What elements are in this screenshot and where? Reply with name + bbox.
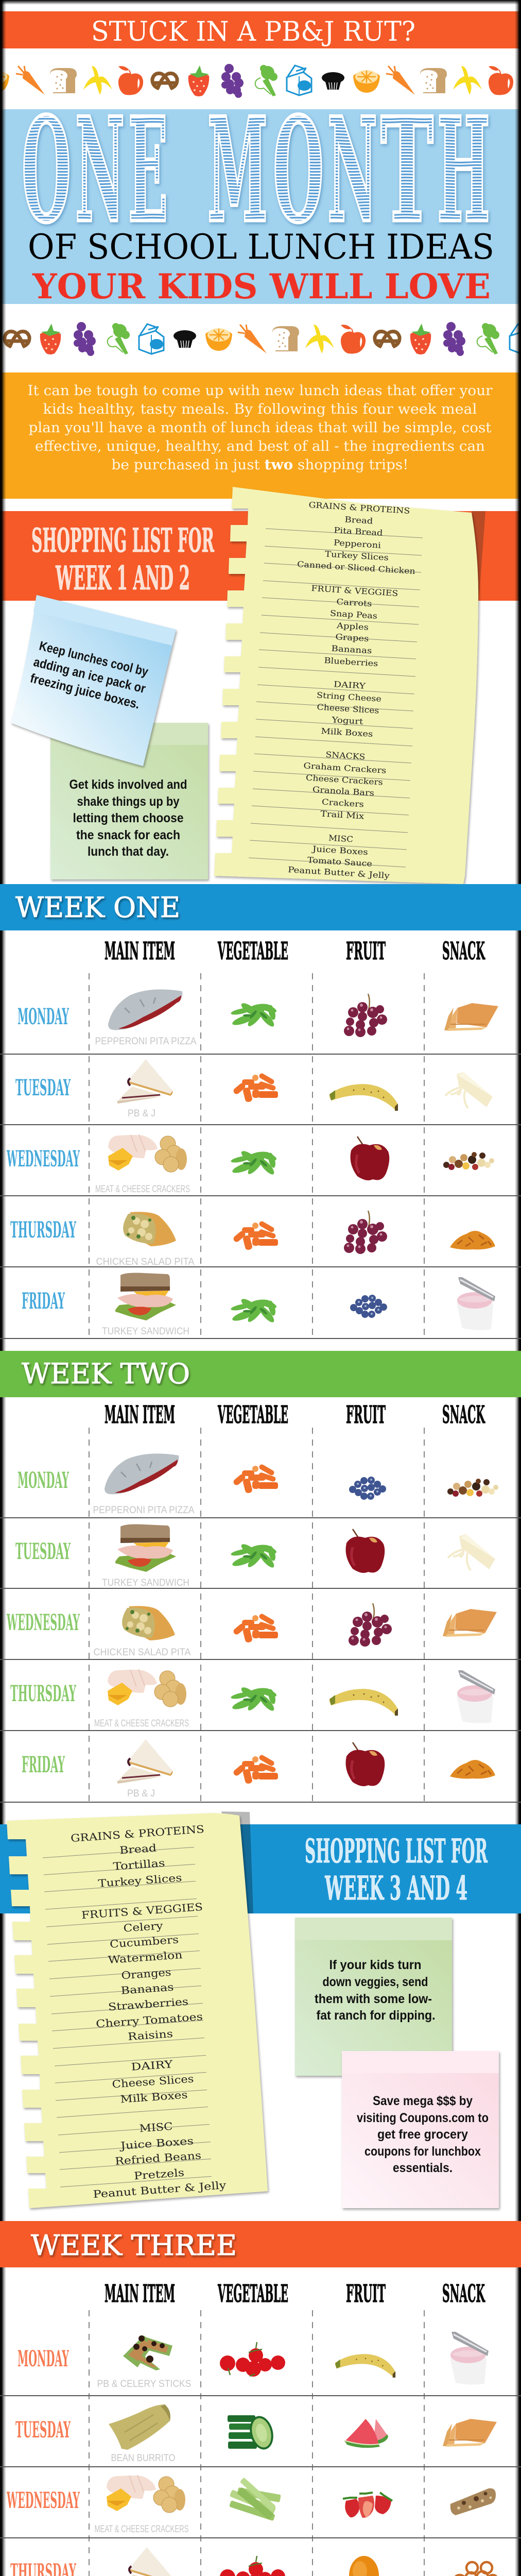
row: week one friday: TURKEY SANDWICH: [102, 1326, 189, 1337]
note: pink coupons tip: [342, 2051, 499, 2208]
row: week one wednesday: [7, 1134, 494, 1195]
column headers week two: [105, 1401, 485, 1429]
row: week two tuesday: [15, 1524, 495, 1588]
title: one month: M: [207, 86, 268, 255]
note: blue ice pack tip: adding an ice pack or: [32, 655, 147, 696]
column headers week two: FRUIT: [346, 1401, 386, 1429]
banner: week one: WEEK ONE: [15, 891, 180, 924]
note: pink coupons tip: coupons for lunchbox: [364, 2144, 481, 2159]
title: one month: N: [75, 86, 125, 255]
intro panel: plan you'll have a month of lunch ideas that will be simple, cost: [29, 420, 492, 436]
list text: fruit and veggies: Apples: [336, 621, 369, 632]
list text: fruits and veggies: Cucumbers: [109, 1933, 179, 1951]
note: shopping list paper week 3 and 4: [7, 1813, 268, 2208]
intro panel: kids healthy, tasty meals. By following this four week meal: [43, 401, 477, 417]
intro panel: be purchased in just two shopping trips!: [111, 457, 409, 473]
list text: grains and proteins: Bread: [119, 1842, 157, 1856]
list text: misc: Juice Boxes: [119, 2134, 194, 2152]
row: week one monday: MONDAY: [18, 1004, 70, 1030]
list text: dairy: DAIRY: [131, 2058, 173, 2073]
note: green snack tip: letting them choose: [73, 811, 184, 825]
column headers week three: VEGETABLE: [218, 2280, 288, 2308]
row: week two thursday: MEAT & CHEESE CRACKERS: [94, 1718, 189, 1729]
row: week three wednesday: MEAT & CHEESE CRACKERS: [95, 2524, 188, 2535]
list text: dairy: [317, 680, 381, 739]
note: green snack tip: Get kids involved and: [69, 777, 187, 792]
list text: snacks: Crackers: [321, 798, 364, 809]
row: week one friday: FRIDAY: [22, 1289, 65, 1314]
title: one month: N: [327, 86, 377, 255]
note: pink coupons tip: visiting Coupons.com to: [357, 2111, 489, 2125]
list text: dairy: [112, 2058, 194, 2106]
banner: week one: [0, 884, 521, 930]
note: pink coupons tip: essentials.: [393, 2161, 453, 2175]
list text: grains and proteins: Bread: [344, 515, 373, 526]
row: week three tuesday: BEAN BURRITO: [111, 2453, 175, 2464]
list text: snacks: Cheese Crackers: [306, 773, 383, 787]
row: week two monday: PEPPERONI PITA PIZZA: [93, 1505, 195, 1516]
row: week three monday: PB & CELERY STICKS: [97, 2379, 192, 2389]
column headers week three: [105, 2280, 485, 2308]
row: week one tuesday: [15, 1059, 493, 1119]
list text: fruit and veggies: FRUIT & VEGGIES: [311, 584, 398, 598]
heading: shopping list: [305, 1832, 488, 1908]
row: week three monday: [18, 2332, 489, 2389]
hero panel: title: [0, 86, 521, 307]
list text: misc: Juice Boxes: [311, 844, 368, 857]
row: week one friday: [22, 1273, 495, 1337]
column headers week one: MAIN ITEM: [105, 937, 175, 965]
list text: snacks: [303, 750, 387, 821]
row: week two monday: MONDAY: [18, 1468, 70, 1494]
title: one month: [22, 86, 490, 255]
row: week three monday: MONDAY: [18, 2346, 70, 2372]
list text: fruits and veggies: Oranges: [121, 1966, 171, 1981]
row: week one thursday: THURSDAY: [10, 1217, 77, 1243]
subtitle: of school lunch ideas: OF SCHOOL LUNCH IDEAS: [28, 227, 494, 267]
list text: fruits and veggies: Watermelon: [108, 1948, 183, 1966]
row: week one tuesday: PB & J: [128, 1108, 155, 1119]
list text: fruits and veggies: Celery: [123, 1919, 164, 1935]
list text: fruit and veggies: Bananas: [331, 644, 372, 655]
banner: week two: WEEK TWO: [22, 1358, 190, 1390]
intro panel: [0, 372, 521, 499]
column headers week one: [105, 937, 485, 965]
column headers week one: VEGETABLE: [218, 937, 288, 965]
list text: fruits and veggies: FRUITS & VEGGIES: [81, 1901, 203, 1921]
row: week two thursday: THURSDAY: [10, 1681, 77, 1707]
list text: grains and proteins: GRAINS & PROTEINS: [70, 1823, 205, 1844]
note: pink coupons tip: Save mega $$$ by: [373, 2094, 473, 2108]
banner: shopping list week 3 and 4: [0, 1811, 521, 1913]
column headers week two: VEGETABLE: [218, 1401, 288, 1429]
note: blue ice pack tip: Keep lunches cool by: [38, 639, 150, 679]
list text: dairy: Milk Boxes: [321, 726, 373, 739]
row: week one thursday: [10, 1211, 495, 1267]
list text: misc: Tomato Sauce: [307, 855, 372, 869]
row: week two monday: [18, 1453, 498, 1516]
list text: grains and proteins: Turkey Slices: [325, 549, 389, 563]
note: green snack tip: [50, 723, 208, 879]
intro panel: It can be tough to come up with new lunch ideas that offer your: [28, 383, 493, 399]
banner: shopping list week 1 and 2: [0, 511, 521, 601]
list text: fruits and veggies: Cherry Tomatoes: [95, 2010, 203, 2030]
subtitle: your kids will love: YOUR KIDS WILL LOVE: [32, 266, 491, 307]
row: week two tuesday: TUESDAY: [15, 1539, 71, 1565]
row: week one thursday: CHICKEN SALAD PITA: [96, 1257, 195, 1267]
column headers week one: FRUIT: [346, 937, 386, 965]
note: blue ice pack tip: [11, 595, 176, 766]
list text: grains and proteins: Turkey Slices: [98, 1871, 182, 1890]
row: week two wednesday: CHICKEN SALAD PITA: [94, 1647, 191, 1658]
list text: misc: Refried Beans: [114, 2149, 202, 2167]
list text: fruits and veggies: [81, 1901, 203, 2043]
row: week two thursday: [10, 1669, 495, 1729]
row: week three wednesday: WEDNESDAY: [7, 2488, 80, 2514]
note: pink coupons tip: get free grocery: [377, 2127, 468, 2142]
note: green snack tip: shake things up by: [77, 794, 180, 809]
list text: misc: Pretzels: [133, 2166, 185, 2182]
list text: snacks: SNACKS: [325, 750, 366, 761]
note: green ranch tip: [295, 1918, 452, 2076]
row: week one monday: PEPPERONI PITA PIZZA: [95, 1036, 197, 1047]
list text: misc: Peanut Butter & Jelly: [93, 2179, 227, 2200]
list text: misc: MISC: [139, 2120, 173, 2134]
list text: dairy: DAIRY: [333, 680, 366, 691]
list text: grains and proteins: [297, 500, 415, 576]
list text: grains and proteins: GRAINS & PROTEINS: [308, 500, 410, 516]
list text: dairy: Milk Boxes: [120, 2088, 188, 2106]
row: week two wednesday: [7, 1603, 497, 1658]
heading: shopping list: [31, 521, 214, 598]
list text: dairy: String Cheese: [317, 690, 381, 704]
row: week three thursday: [10, 2547, 498, 2576]
list text: fruit and veggies: Snap Peas: [329, 608, 377, 621]
note: green ranch tip: fat ranch for dipping.: [316, 2008, 436, 2023]
list text: fruits and veggies: Strawberries: [108, 1995, 189, 2013]
icon row: food icons bottom: [5, 322, 521, 356]
note: green snack tip: the snack for each: [76, 828, 180, 842]
list text: fruit and veggies: Carrots: [336, 597, 372, 608]
list text: grains and proteins: Canned or Sliced Chicken: [297, 560, 415, 576]
list text: grains and proteins: Pita Bread: [334, 526, 383, 538]
intro panel: effective, unique, healthy, and best of all - the ingredients can: [35, 438, 485, 454]
heading: shopping list: WEEK 1 AND 2: [56, 559, 190, 598]
list text: misc: [288, 834, 390, 880]
list text: snacks: Trail Mix: [320, 809, 364, 821]
note: blue ice pack tip: freezing juice boxes.: [29, 671, 141, 712]
top banner: stuck in a rut: STUCK IN A PB&J RUT?: [91, 16, 415, 47]
row: week two tuesday: TURKEY SANDWICH: [102, 1578, 189, 1588]
list text: snacks: Graham Crackers: [303, 761, 387, 775]
row: week one wednesday: WEDNESDAY: [7, 1146, 80, 1172]
row: week three tuesday: TUESDAY: [15, 2417, 71, 2443]
list text: misc: Peanut Butter & Jelly: [288, 865, 390, 880]
title: one month: O: [22, 86, 71, 255]
row: week two friday: PB & J: [127, 1788, 155, 1799]
note: green ranch tip: them with some low-: [315, 1992, 432, 2006]
column headers week two: MAIN ITEM: [105, 1401, 175, 1429]
list text: grains and proteins: Pepperoni: [333, 538, 381, 550]
column headers week three: MAIN ITEM: [105, 2280, 175, 2308]
note: green ranch tip: If your kids turn: [329, 1958, 421, 1972]
row: week three tuesday: [15, 2404, 497, 2464]
row: week two friday: FRIDAY: [22, 1752, 65, 1778]
list text: dairy: Yogurt: [331, 715, 364, 726]
row: week one tuesday: TUESDAY: [15, 1075, 71, 1101]
list text: dairy: Cheese Slices: [112, 2072, 194, 2091]
top banner: stuck in a rut: [0, 11, 521, 48]
list text: fruit and veggies: Blueberries: [324, 656, 378, 668]
list text: misc: MISC: [328, 834, 353, 844]
list text: fruits and veggies: Raisins: [127, 2027, 173, 2043]
list text: grains and proteins: [70, 1823, 205, 1890]
icon row: food icons top: [0, 64, 513, 98]
title: one month: O: [273, 86, 324, 255]
list text: misc: [93, 2120, 227, 2200]
note: shopping list paper week 1 and 2: [214, 487, 478, 884]
title: one month: E: [128, 86, 168, 255]
banner: week three: WEEK THREE: [31, 2229, 237, 2262]
banner: week two: [0, 1351, 521, 1397]
row: week two wednesday: WEDNESDAY: [7, 1610, 80, 1636]
row: week one monday: [18, 989, 498, 1047]
column headers week three: FRUIT: [346, 2280, 386, 2308]
list text: snacks: Granola Bars: [312, 785, 374, 798]
list text: dairy: Cheese Slices: [317, 702, 379, 716]
note: green ranch tip: down veggies, send: [322, 1975, 428, 1989]
list text: fruits and veggies: Bananas: [120, 1980, 174, 1997]
row: week three wednesday: [7, 2475, 496, 2535]
note: green snack tip: lunch that day.: [88, 844, 169, 859]
row: week one wednesday: MEAT & CHEESE CRACKERS: [95, 1184, 190, 1195]
row: week two friday: [22, 1739, 495, 1799]
list text: fruit and veggies: [311, 584, 398, 668]
banner: shopping list week 1 and 2: SHOPPING LIST FOR: [31, 521, 214, 560]
list text: grains and proteins: Tortillas: [113, 1857, 165, 1872]
list text: fruit and veggies: Grapes: [335, 632, 369, 643]
title: one month: T: [380, 86, 433, 255]
banner: week three: [0, 2221, 521, 2267]
